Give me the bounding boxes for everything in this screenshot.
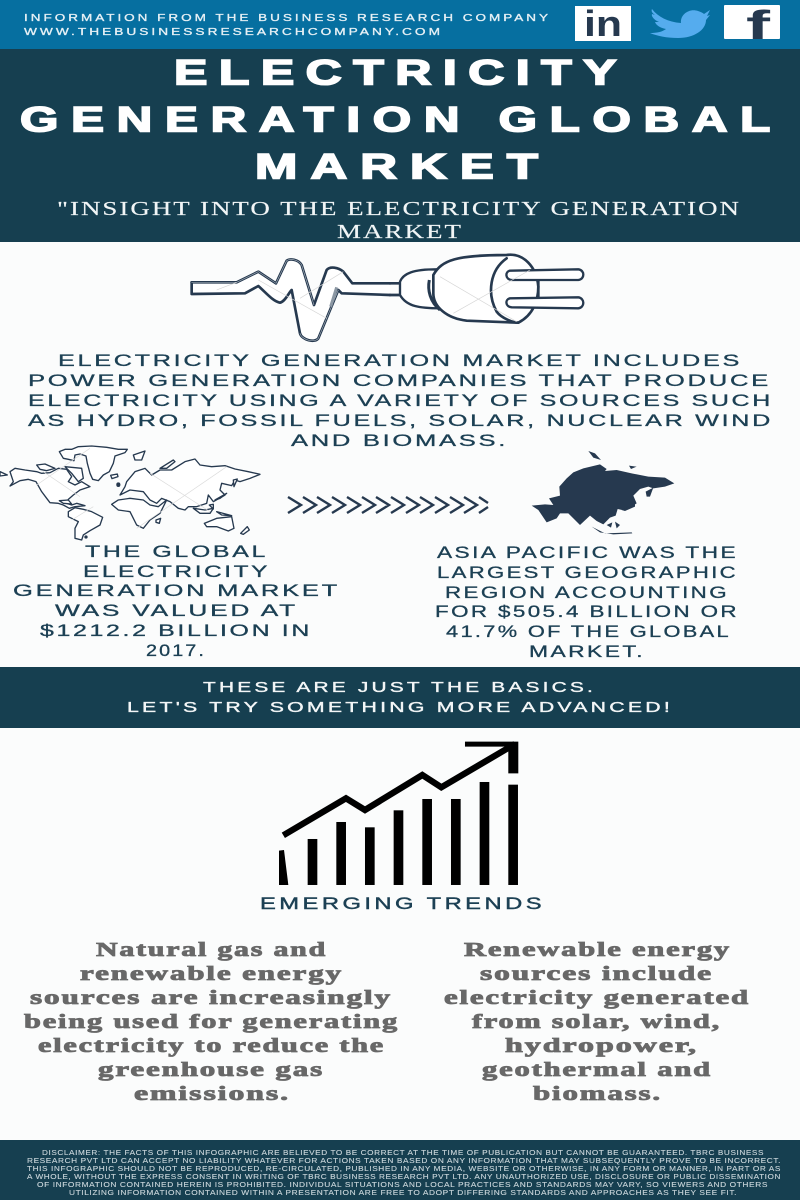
panel: transition banner: LET'S TRY SOMETHING MORE ADVANCED! [127, 700, 673, 716]
text: asia pacific share: MARKET. [529, 642, 645, 661]
text: natural gas trend: being used for generating [24, 1011, 399, 1033]
description paragraph: POWER GENERATION COMPANIES THAT PRODUCE [28, 371, 771, 390]
text: natural gas trend: Natural gas and [96, 939, 327, 961]
description paragraph: ELECTRICITY GENERATION MARKET INCLUDES [58, 351, 742, 370]
text: global market value: THE GLOBAL [85, 542, 268, 561]
title [20, 54, 783, 186]
panel: disclaimer footer: RESEARCH PVT LTD CAN ACCEPT NO LIABILITY WHATEVER FOR ACTIONS TAKEN BASED ON ANY INFORMATION THAT MAY SUBSEQUENTLY PROVE TO BE INCORRECT. [27, 1158, 781, 1165]
panel: disclaimer footer: DISCLAIMER: THE FACTS OF THIS INFOGRAPHIC ARE BELIEVED TO BE CORRECT AT THE TIME OF PUBLICATION BUT CANNOT BE GUARANTEED. TBRC BUSINESS [42, 1150, 764, 1157]
subtitle: MARKET [337, 221, 463, 243]
text: renewable sources trend: electricity generated [444, 987, 750, 1009]
text: renewable sources trend: sources include [480, 963, 713, 985]
americas and greenland [0, 446, 127, 540]
chart: rising trend icon [279, 742, 518, 885]
source text: INFORMATION FROM THE BUSINESS RESEARCH COMPANY [24, 13, 551, 24]
icon: linkedin: in [584, 3, 622, 44]
panel: disclaimer footer: A WHOLE, WITHOUT THE EXPRESS CONSENT IN WRITING OF TBRC BUSINESS RESEARCH PVT LTD. ANY UNAUTHORIZED USE, DISCLOSURE OR PUBLIC DISSEMINATION [27, 1174, 781, 1181]
title: ELECTRICITY [174, 54, 628, 92]
text: global market value: $1212.2 BILLION IN [40, 621, 312, 640]
plug head [390, 255, 583, 323]
text: renewable sources trend [444, 939, 750, 1105]
text: natural gas trend: emissions. [134, 1083, 290, 1105]
panel: disclaimer footer: OF INFORMATION CONTAINED HEREIN IS PROHIBITED. INDIVIDUAL SITUATIONS AND LOCAL PRACTICES AND STANDARDS MAY VARY, SO VIEWERS AND OTHERS [37, 1182, 768, 1189]
text: asia pacific share: ASIA PACIFIC WAS THE [437, 543, 738, 562]
icon: facebook [724, 2, 780, 48]
text: asia pacific share: 41.7% OF THE GLOBAL [446, 622, 731, 641]
text: global market value: GENERATION MARKET [13, 581, 340, 600]
text: global market value: 2017. [146, 641, 206, 660]
text: asia pacific share: LARGEST GEOGRAPHIC [437, 563, 738, 582]
text: renewable sources trend: biomass. [533, 1083, 662, 1105]
description paragraph: AS HYDRO, FOSSIL FUELS, SOLAR, NUCLEAR WIND [28, 411, 773, 430]
source text [24, 13, 551, 38]
text: renewable sources trend: geothermal and [482, 1059, 712, 1081]
text: natural gas trend [24, 939, 399, 1105]
text: asia pacific share [435, 543, 739, 661]
description paragraph [28, 351, 773, 450]
text: global market value [13, 542, 340, 660]
plug cord [192, 259, 390, 341]
text: natural gas trend: electricity to reduce the [38, 1035, 385, 1057]
icon: twitter [650, 9, 710, 38]
text: natural gas trend: renewable energy [80, 963, 343, 985]
subtitle: "INSIGHT INTO THE ELECTRICITY GENERATION [57, 198, 741, 220]
text: natural gas trend: sources are increasingly [30, 987, 392, 1009]
panel: header bar [0, 0, 800, 49]
subtitle [57, 198, 741, 243]
icon: linkedin [575, 3, 631, 44]
panel: disclaimer footer: THIS INFOGRAPHIC SHOULD NOT BE REPRODUCED, RE-CIRCULATED, PUBLISHED IN ANY MEDIA, WEBSITE OR OTHERWISE, IN ANY FORM OR MANNER, IN PART OR AS [27, 1166, 781, 1173]
icon: facebook: f [746, 2, 771, 48]
source text: WWW.THEBUSINESSRESEARCHCOMPANY.COM [24, 27, 443, 38]
panel: disclaimer footer [0, 1140, 800, 1200]
description paragraph: AND BIOMASS. [291, 431, 508, 450]
text: global market value: WAS VALUED AT [55, 601, 298, 620]
text: renewable sources trend: from solar, wind, [472, 1011, 721, 1033]
eurasia africa australia [112, 451, 260, 534]
title: MARKET [255, 148, 551, 186]
title: GENERATION GLOBAL [20, 100, 783, 140]
arrow: chevrons [288, 497, 488, 513]
panel: transition banner: THESE ARE JUST THE BASICS. [203, 680, 596, 696]
icon: electric plug [192, 255, 583, 341]
text: asia pacific share: REGION ACCOUNTING [445, 583, 729, 602]
heading: emerging trends: EMERGING TRENDS [260, 895, 545, 913]
text: renewable sources trend: Renewable energy [464, 939, 731, 961]
panel: transition banner [0, 667, 800, 728]
text: global market value: ELECTRICITY [83, 562, 270, 581]
text: asia pacific share: FOR $505.4 BILLION OR [435, 602, 739, 621]
panel: disclaimer footer: UTILIZING INFORMATION CONTAINED WITHIN A PRESENTATION ARE FREE TO ADOPT DIFFERING STANDARDS AND APPROACHES AS THEY SEE FIT. [69, 1190, 737, 1197]
description paragraph: ELECTRICITY USING A VARIETY OF SOURCES SUCH [28, 391, 773, 410]
text: renewable sources trend: hydropower, [505, 1035, 698, 1057]
text: natural gas trend: greenhouse gas [98, 1059, 324, 1081]
icon: world map [0, 446, 260, 540]
panel: title block [0, 49, 800, 243]
icon: asia map [532, 451, 674, 534]
